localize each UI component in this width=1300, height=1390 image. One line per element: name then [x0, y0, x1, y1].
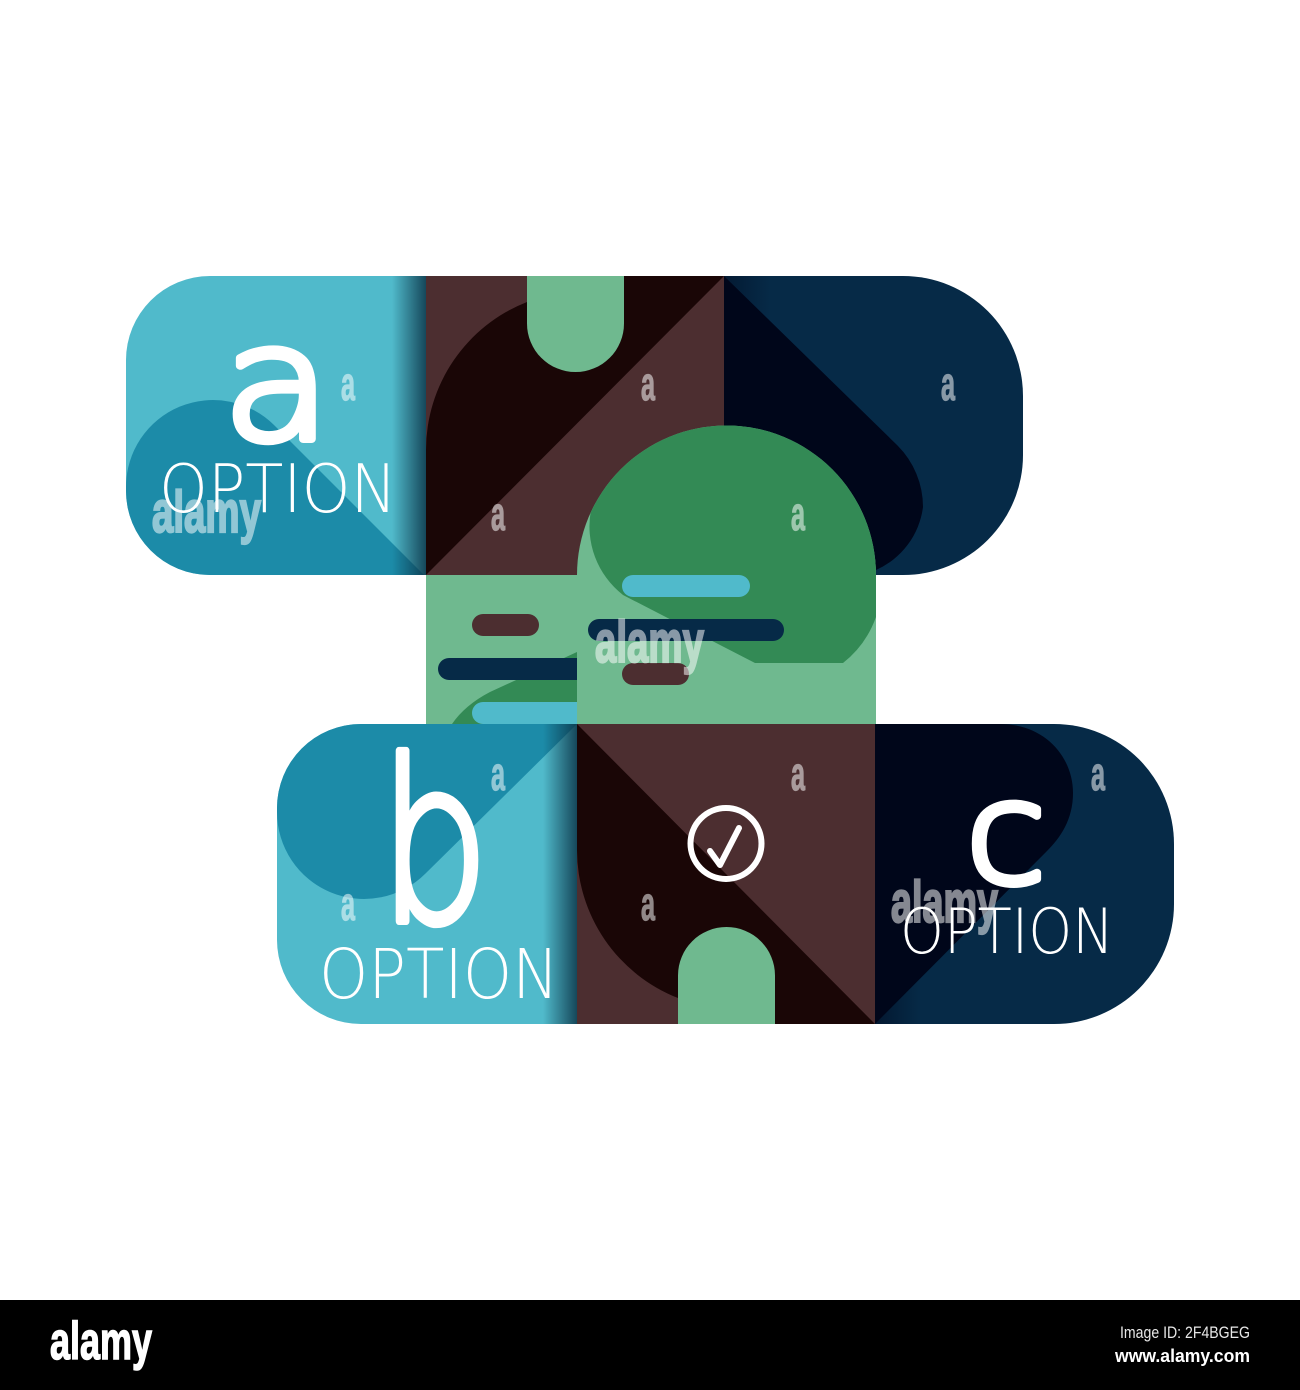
- watermark: stock photo marks: a: [941, 357, 955, 410]
- label: option c: OPTION: [900, 895, 1114, 968]
- label: option a: a: [222, 290, 332, 477]
- panel: brown bottom: [577, 724, 875, 1024]
- watermark: stock photo marks: a: [641, 357, 655, 410]
- watermark: stock photo marks: a: [1091, 747, 1105, 800]
- watermark: stock photo marks: a: [491, 487, 505, 540]
- panel: brown top: [426, 276, 724, 575]
- label: option b: [319, 713, 559, 1015]
- panel: green dome with text bars: [577, 425, 876, 724]
- panel: option a: [126, 276, 426, 577]
- watermark: stock photo marks: a: [641, 877, 655, 930]
- watermark: stock photo marks: alamy: [152, 480, 261, 545]
- label: option a: OPTION: [159, 450, 397, 528]
- footer bar: [0, 1300, 1300, 1390]
- label: option c: [900, 753, 1114, 968]
- watermark: stock photo marks: [152, 357, 1105, 935]
- watermark: stock photo marks: a: [341, 877, 355, 930]
- panel: navy top: [724, 276, 1023, 580]
- label: option a: [159, 290, 397, 528]
- icon: check mark in circle: [690, 808, 762, 879]
- footer bar: alamy: [50, 1312, 152, 1371]
- label: option b: OPTION: [319, 935, 559, 1015]
- panel: option b: [277, 724, 577, 1024]
- watermark: stock photo marks: alamy: [891, 870, 998, 935]
- watermark: stock photo marks: alamy: [595, 610, 704, 675]
- label: option b: b: [379, 713, 489, 974]
- label: option c: c: [966, 753, 1046, 916]
- footer bar: www.alamy.com: [1114, 1346, 1250, 1366]
- watermark: stock photo marks: a: [791, 747, 805, 800]
- watermark: stock photo marks: a: [491, 747, 505, 800]
- footer bar: Image ID: 2F4BGEG: [1120, 1323, 1250, 1342]
- watermark: stock photo marks: a: [791, 487, 805, 540]
- panel: navy bottom: [875, 724, 1174, 1024]
- watermark: stock photo marks: a: [341, 357, 355, 410]
- panel: light green block with text bars: [426, 575, 592, 724]
